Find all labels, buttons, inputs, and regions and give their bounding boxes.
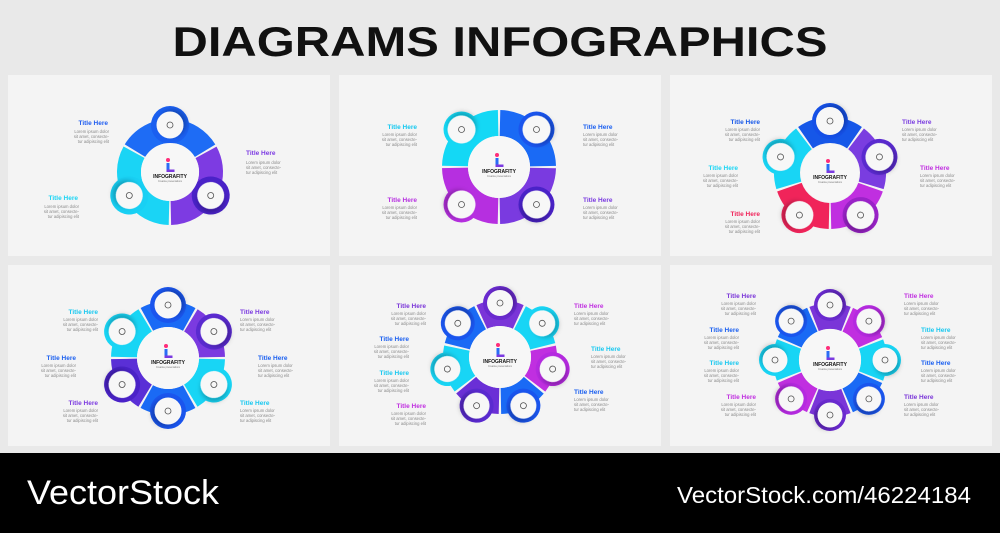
text: step 1: tur adipiscing elit xyxy=(386,142,418,147)
text: step 4: tur adipiscing elit xyxy=(395,421,427,426)
panel: 3 steps xyxy=(8,75,330,256)
text: step 6: Lorem ipsum dolor xyxy=(591,354,626,359)
text: step 4: tur adipiscing elit xyxy=(240,327,272,332)
text: step 2 xyxy=(246,150,282,175)
text: step 4: Lorem ipsum dolor xyxy=(240,317,275,322)
text: step 2 xyxy=(583,124,619,147)
text: step 6 xyxy=(921,327,957,350)
text: step 8 xyxy=(904,394,940,417)
text: step 6: Title Here xyxy=(921,327,951,334)
text: step 4: sit amet, consecte- xyxy=(240,322,276,327)
text: step 5 xyxy=(258,355,294,378)
text: step 5: Lorem ipsum dolor xyxy=(904,301,939,306)
text: step 4 xyxy=(583,197,619,220)
text: step 6: tur adipiscing elit xyxy=(591,364,623,369)
text: step 8: sit amet, consecte- xyxy=(904,407,940,412)
text: step 2: tur adipiscing elit xyxy=(583,142,615,147)
text: step 4: tur adipiscing elit xyxy=(583,215,615,220)
footer: brand: VectorStock xyxy=(27,474,220,512)
text: step 5: sit amet, consecte- xyxy=(904,306,940,311)
text: step 2: sit amet, consecte- xyxy=(41,368,77,373)
text: step 2: Title Here xyxy=(379,336,409,343)
text: step 1: tur adipiscing elit xyxy=(78,139,110,144)
text: step 1: sit amet, consecte- xyxy=(63,322,99,327)
text: step 1: tur adipiscing elit xyxy=(725,311,757,316)
text: step 4: tur adipiscing elit xyxy=(902,137,934,142)
text: step 2: sit amet, consecte- xyxy=(704,340,740,345)
text: step 2: sit amet, consecte- xyxy=(246,165,282,170)
text: step 5: Title Here xyxy=(904,293,934,300)
text: step 6 xyxy=(591,346,627,369)
text: step 3: sit amet, consecte- xyxy=(725,224,761,229)
text: step 5: Lorem ipsum dolor xyxy=(258,363,293,368)
text: step 2: Lorem ipsum dolor xyxy=(374,344,410,349)
text: step 1: Title Here xyxy=(68,309,98,316)
text: step 2: Lorem ipsum dolor xyxy=(703,173,739,178)
text: step 2: Title Here xyxy=(583,124,613,131)
text: step 3: tur adipiscing elit xyxy=(67,418,99,423)
text: step 1: sit amet, consecte- xyxy=(721,306,757,311)
text: step 7: sit amet, consecte- xyxy=(574,402,610,407)
text: step 3: Title Here xyxy=(48,195,78,202)
text: step 2: Title Here xyxy=(709,327,739,334)
text: step 8: tur adipiscing elit xyxy=(904,412,936,417)
panel: 4 steps xyxy=(339,75,661,256)
text: step 4: Title Here xyxy=(726,394,756,401)
text: step 3: tur adipiscing elit xyxy=(708,378,740,383)
text: step 1: Lorem ipsum dolor xyxy=(725,127,761,132)
text: step 5: sit amet, consecte- xyxy=(574,316,610,321)
text: step 1: sit amet, consecte- xyxy=(74,134,110,139)
diagram: 4 segment ring xyxy=(436,104,562,230)
text: step 2: Lorem ipsum dolor xyxy=(583,132,618,137)
text: step 3: sit amet, consecte- xyxy=(44,209,80,214)
text: step 2: Lorem ipsum dolor xyxy=(246,160,281,165)
text: step 4: Lorem ipsum dolor xyxy=(583,205,618,210)
text: step 1: Title Here xyxy=(726,293,756,300)
text: step 1 xyxy=(391,303,427,326)
text: step 7: tur adipiscing elit xyxy=(574,407,606,412)
text: step 5: tur adipiscing elit xyxy=(574,321,606,326)
text: step 4 xyxy=(391,403,427,426)
text: step 3: Title Here xyxy=(68,400,98,407)
text: step 1: Title Here xyxy=(387,124,417,131)
text: step 5 xyxy=(574,303,610,326)
text: step 3: tur adipiscing elit xyxy=(386,215,418,220)
text: step 6 xyxy=(240,400,276,423)
text: step 6: sit amet, consecte- xyxy=(240,413,276,418)
text: step 5 xyxy=(920,165,956,188)
text: step 1: Lorem ipsum dolor xyxy=(382,132,418,137)
text: step 6: tur adipiscing elit xyxy=(921,345,953,350)
text: step 3: sit amet, consecte- xyxy=(382,210,418,215)
text: step 2: tur adipiscing elit xyxy=(45,373,77,378)
text: step 2 xyxy=(703,165,739,188)
text: step 3: Lorem ipsum dolor xyxy=(44,204,80,209)
text: step 2: sit amet, consecte- xyxy=(703,178,739,183)
text: step 5: sit amet, consecte- xyxy=(920,178,956,183)
text: step 5 xyxy=(904,293,940,316)
diagram: 5 segment ring xyxy=(758,103,902,240)
text: step 1: Lorem ipsum dolor xyxy=(63,317,99,322)
text: step 4: sit amet, consecte- xyxy=(721,407,757,412)
text: step 5: Title Here xyxy=(258,355,288,362)
text: step 1: tur adipiscing elit xyxy=(67,327,99,332)
text: step 4 xyxy=(902,119,938,142)
text: step 3: sit amet, consecte- xyxy=(704,373,740,378)
text: step 2: Title Here xyxy=(246,150,276,157)
text: step 3 xyxy=(382,197,418,220)
text: step 6: Lorem ipsum dolor xyxy=(921,335,956,340)
text: step 3 xyxy=(44,195,80,219)
text: step 8: Title Here xyxy=(904,394,934,401)
text: step 5: tur adipiscing elit xyxy=(920,183,952,188)
text: step 2: tur adipiscing elit xyxy=(246,170,278,175)
text: step 2 xyxy=(374,336,410,359)
text: step 5: tur adipiscing elit xyxy=(258,373,290,378)
text: step 7: Lorem ipsum dolor xyxy=(921,368,956,373)
text: step 2: Title Here xyxy=(46,355,76,362)
text: step 7 xyxy=(921,360,957,383)
text: step 3: Lorem ipsum dolor xyxy=(704,368,740,373)
text: step 7 xyxy=(574,389,610,412)
text: step 3 xyxy=(725,211,761,234)
text: step 1: sit amet, consecte- xyxy=(391,316,427,321)
text: step 1: Lorem ipsum dolor xyxy=(391,311,427,316)
text: step 4: Lorem ipsum dolor xyxy=(902,127,937,132)
text: step 3 xyxy=(63,400,99,423)
text: step 7: Lorem ipsum dolor xyxy=(574,397,609,402)
text: step 4 xyxy=(721,394,757,417)
text: step 3: Title Here xyxy=(709,360,739,367)
text: step 4: sit amet, consecte- xyxy=(583,210,619,215)
text: step 3: Lorem ipsum dolor xyxy=(374,378,410,383)
text: step 4: tur adipiscing elit xyxy=(725,412,757,417)
text: step 1: sit amet, consecte- xyxy=(382,137,418,142)
text: step 3 xyxy=(374,370,410,393)
text: step 4 xyxy=(240,309,276,332)
text: step 3: Title Here xyxy=(387,197,417,204)
text: step 2: Lorem ipsum dolor xyxy=(704,335,740,340)
text: step 1 xyxy=(725,119,761,142)
text: step 8: Lorem ipsum dolor xyxy=(904,402,939,407)
panel: 6 steps xyxy=(8,265,330,446)
diagram: 6 segment ring xyxy=(98,287,238,429)
text: step 7: tur adipiscing elit xyxy=(921,378,953,383)
text: step 6: Title Here xyxy=(240,400,270,407)
text: step 3: Title Here xyxy=(730,211,760,218)
footer bar xyxy=(0,453,1000,533)
diagram: 8 segment ring xyxy=(759,289,901,431)
text: step 4: Title Here xyxy=(902,119,932,126)
text: step 1: Title Here xyxy=(78,120,108,127)
text: step 1: tur adipiscing elit xyxy=(729,137,761,142)
text: step 3: sit amet, consecte- xyxy=(374,383,410,388)
footer: url: VectorStock.com/46224184 xyxy=(677,482,971,508)
text: step 4: Lorem ipsum dolor xyxy=(391,411,427,416)
text: step 1: Lorem ipsum dolor xyxy=(721,301,757,306)
text: step 1 xyxy=(63,309,99,332)
text: step 2: sit amet, consecte- xyxy=(374,349,410,354)
text: step 1 xyxy=(721,293,757,316)
text: step 2: Title Here xyxy=(708,165,738,172)
text: step 3: Lorem ipsum dolor xyxy=(382,205,418,210)
text: step 3 xyxy=(704,360,740,383)
text: step 6: sit amet, consecte- xyxy=(591,359,627,364)
text: step 3: Lorem ipsum dolor xyxy=(63,408,99,413)
text: step 3: tur adipiscing elit xyxy=(48,214,80,219)
text: step 4: Title Here xyxy=(396,403,426,410)
text: step 6: tur adipiscing elit xyxy=(240,418,272,423)
diagram: 3 segment ring xyxy=(103,106,237,228)
text: step 2 xyxy=(41,355,77,378)
text: step 3: Lorem ipsum dolor xyxy=(725,219,761,224)
text: step 5: Title Here xyxy=(920,165,950,172)
text: step 2 xyxy=(704,327,740,350)
text: step 5: sit amet, consecte- xyxy=(258,368,294,373)
text: step 1: Lorem ipsum dolor xyxy=(74,129,110,134)
text: step 2: tur adipiscing elit xyxy=(708,345,740,350)
text: step 4: sit amet, consecte- xyxy=(902,132,938,137)
text: step 1: Title Here xyxy=(396,303,426,310)
text: step 5: tur adipiscing elit xyxy=(904,311,936,316)
text: step 6: Lorem ipsum dolor xyxy=(240,408,275,413)
diagram: 7 segment ring xyxy=(427,286,573,428)
panel: 8 steps xyxy=(670,265,992,446)
text: step 3: Title Here xyxy=(379,370,409,377)
text: step 6: Title Here xyxy=(591,346,621,353)
text: step 3: tur adipiscing elit xyxy=(729,229,761,234)
text: step 4: Lorem ipsum dolor xyxy=(721,402,757,407)
text: step 1 xyxy=(74,120,110,144)
text: step 5: Lorem ipsum dolor xyxy=(920,173,955,178)
text: step 1: tur adipiscing elit xyxy=(395,321,427,326)
text: step 6: sit amet, consecte- xyxy=(921,340,957,345)
title: DIAGRAMS INFOGRAPHICS xyxy=(172,18,828,65)
text: step 7: Title Here xyxy=(574,389,604,396)
text: step 2: sit amet, consecte- xyxy=(583,137,619,142)
text: step 5: Lorem ipsum dolor xyxy=(574,311,609,316)
text: step 3: sit amet, consecte- xyxy=(63,413,99,418)
text: step 2: tur adipiscing elit xyxy=(378,354,410,359)
text: step 1: sit amet, consecte- xyxy=(725,132,761,137)
panel: 7 steps xyxy=(339,265,661,446)
text: step 5: Title Here xyxy=(574,303,604,310)
text: step 7: sit amet, consecte- xyxy=(921,373,957,378)
text: step 1 xyxy=(382,124,418,147)
text: step 2: Lorem ipsum dolor xyxy=(41,363,77,368)
text: step 4: Title Here xyxy=(240,309,270,316)
text: step 3: tur adipiscing elit xyxy=(378,388,410,393)
text: step 4: sit amet, consecte- xyxy=(391,416,427,421)
text: step 7: Title Here xyxy=(921,360,951,367)
text: step 1: Title Here xyxy=(730,119,760,126)
text: step 4: Title Here xyxy=(583,197,613,204)
text: step 2: tur adipiscing elit xyxy=(707,183,739,188)
panel: 5 steps xyxy=(670,75,992,256)
